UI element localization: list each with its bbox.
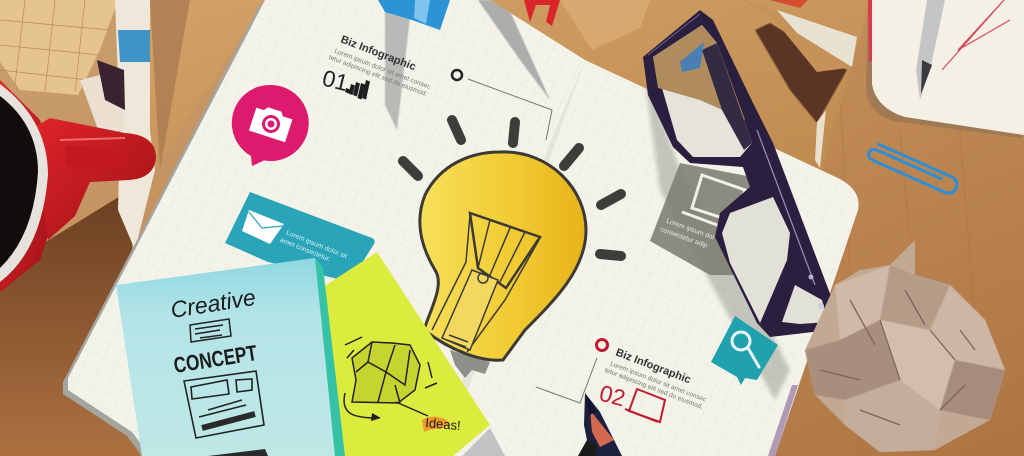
icon: red laptop xyxy=(625,389,665,422)
orange highlight xyxy=(422,417,450,432)
frame highlights xyxy=(757,130,815,285)
red scribble xyxy=(942,0,1010,70)
crumpled paper sketch xyxy=(344,337,437,418)
yellow sticky note xyxy=(323,252,505,456)
icon: envelope xyxy=(242,210,284,244)
grid paper top left xyxy=(0,0,118,95)
info block 01 xyxy=(320,34,432,99)
handwritten: Creative: Creative xyxy=(169,284,257,323)
icon: signal bars xyxy=(345,80,370,100)
glasses xyxy=(643,10,840,337)
pencil xyxy=(578,393,622,456)
ring 02 xyxy=(596,340,608,350)
heading: Biz Infographic 02: Biz Infographic xyxy=(614,347,692,386)
heading: Biz Infographic 01: Biz Infographic xyxy=(339,34,417,73)
icon: magnifier xyxy=(732,332,759,367)
sketch: page layout xyxy=(184,371,264,438)
mail card text: amet consectetur. xyxy=(279,237,331,263)
card text: consectetur adip xyxy=(659,226,708,250)
icon: camera bubble xyxy=(232,85,309,166)
right lens xyxy=(722,197,790,323)
blue paper clip xyxy=(867,142,960,196)
red coffee mug xyxy=(0,80,156,292)
body text 02: tetur adipiscing elit sed do eiusmod. xyxy=(603,367,704,411)
connector ring and line 01 xyxy=(452,70,552,140)
envelope flap and shadow xyxy=(743,0,857,168)
grey laptop card xyxy=(650,163,763,275)
body text 01: Lorem ipsum dolor sit amet consec xyxy=(333,48,432,91)
silver pen xyxy=(916,0,945,100)
top clips xyxy=(378,0,560,30)
stacked papers left xyxy=(80,0,155,250)
left lens xyxy=(653,25,752,157)
mug rim and coffee xyxy=(0,84,48,282)
light bulb xyxy=(403,120,621,378)
card text: Lorem ipsum dol xyxy=(665,218,715,242)
info block 02 xyxy=(536,340,708,422)
crumpled paper ball xyxy=(805,240,1005,452)
sketch: text box xyxy=(190,319,231,342)
connector line 02 xyxy=(536,358,597,403)
mail card xyxy=(225,192,375,282)
bulb base thread xyxy=(450,350,490,378)
body text 01: tetur adipiscing elit sed do eiusmod. xyxy=(328,54,428,98)
kraft envelope xyxy=(150,0,870,170)
shadows on notebook xyxy=(385,0,790,400)
bulb filament xyxy=(432,213,540,352)
white notepad top right xyxy=(866,0,1024,138)
body text 02: Lorem ipsum dolor sit amet consec xyxy=(609,360,708,404)
blue sticky note xyxy=(116,258,345,456)
notebook xyxy=(63,0,859,456)
search tag xyxy=(711,316,778,385)
number 02: 02 xyxy=(597,380,628,411)
icon: screen xyxy=(682,175,745,232)
bulb body xyxy=(420,152,586,360)
label: Ideas!: Ideas! xyxy=(425,415,461,433)
mail card text: Lorem ipsum dolor sit xyxy=(285,230,348,260)
handwritten: CONCEPT: CONCEPT xyxy=(172,340,259,378)
bulb rays xyxy=(403,120,621,256)
camera glyph xyxy=(249,104,294,142)
number 01: 01 xyxy=(320,65,351,96)
